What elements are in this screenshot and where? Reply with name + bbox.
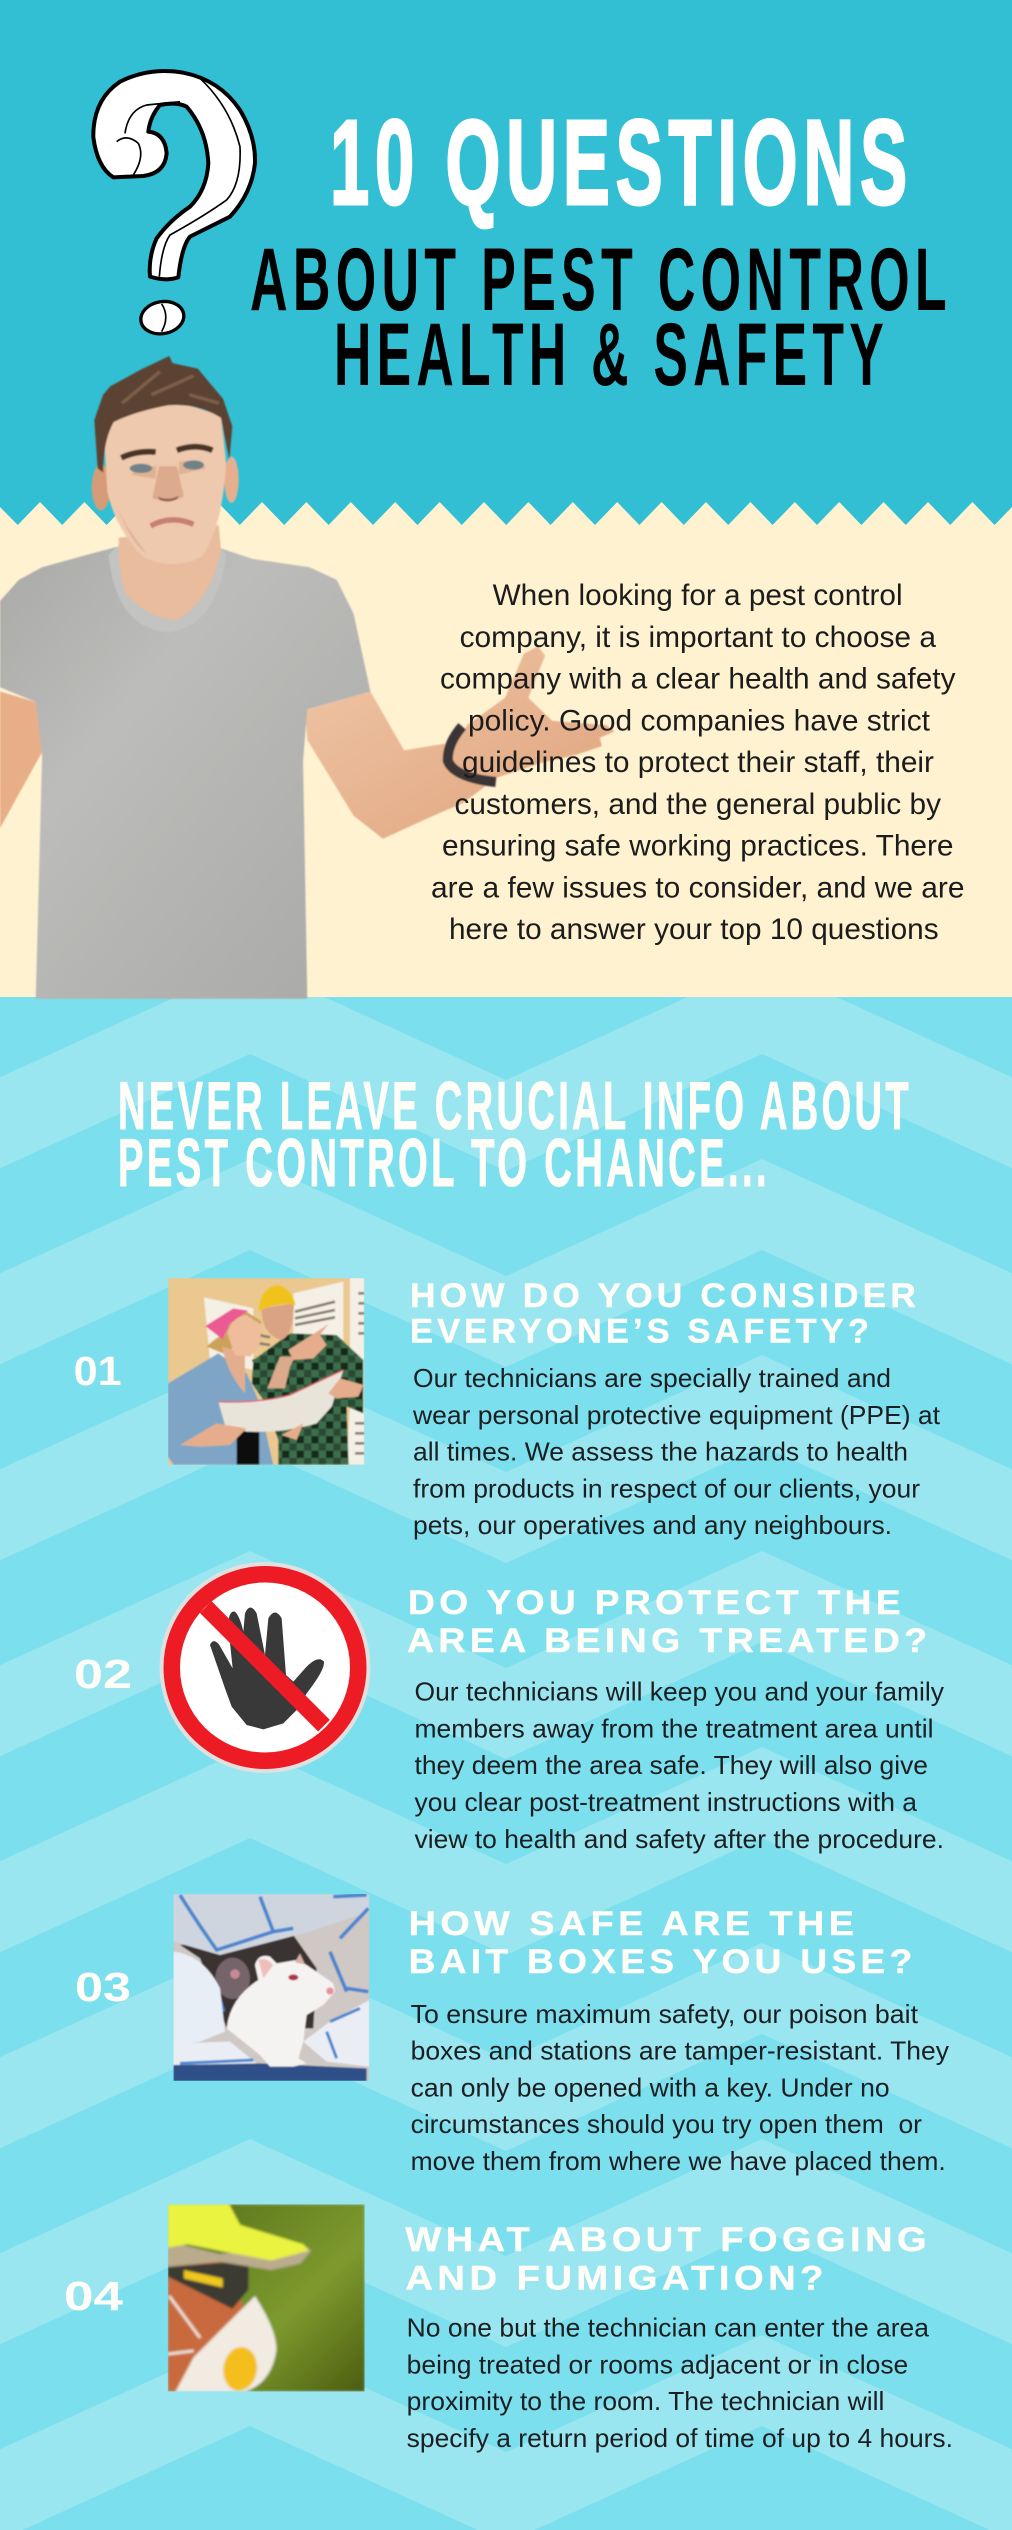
text block: answer 2: they deem the area safe. They will also give [414, 1750, 928, 1780]
cap [168, 2241, 311, 2270]
man in plaid shirt [252, 1333, 363, 1465]
panel: header background [0, 0, 1012, 530]
mask valve [220, 2345, 260, 2393]
text block: intro: When looking for a pest control [493, 579, 903, 612]
text block: answer 3: boxes and stations are tamper-resistant. They [411, 2036, 949, 2066]
woman denim jacket [168, 1353, 273, 1465]
text block: intro: are a few issues to consider, and we are [431, 871, 964, 904]
text block: answer 4: proximity to the room. The technician will [407, 2386, 884, 2416]
heading: question 1: HOW DO YOU CONSIDER [410, 1277, 920, 1315]
text block: intro: guidelines to protect their staff, their [462, 746, 934, 779]
white rat [227, 1956, 335, 2067]
text block: intro: here to answer your top 10 questions [449, 913, 939, 946]
heading: question 3 [409, 1905, 917, 1981]
ears [92, 464, 110, 510]
number 02: 02 [74, 1651, 132, 1697]
number 04: 04 [64, 2273, 123, 2319]
text block: answer 1: pets, our operatives and any neighbours. [413, 1510, 892, 1540]
man's forearm [267, 1357, 295, 1388]
number 01: 01 [74, 1348, 122, 1394]
text block: intro: company, it is important to choose a [460, 621, 937, 654]
text block: answer 3: To ensure maximum safety, our poison bait [411, 1999, 919, 2029]
heading: question 2 [407, 1584, 932, 1660]
icon: question mark [93, 71, 255, 337]
text block: intro [431, 579, 964, 946]
heading: question 1: EVERYONE’S SAFETY? [410, 1312, 873, 1350]
woman's hair [207, 1312, 262, 1353]
text block: intro: ensuring safe working practices. There [442, 830, 954, 862]
woman's neck [222, 1347, 245, 1393]
text block: answer 3: can only be opened with a key. Under no [411, 2072, 890, 2102]
text block: answer 4: specify a return period of time of up to 4 hours. [407, 2423, 953, 2453]
bandana [205, 1308, 248, 1339]
text block: answer 3: circumstances should you try open them or [411, 2109, 922, 2139]
eyebrows [121, 447, 213, 458]
text block: answer 2 [414, 1677, 944, 1854]
text block: answer 3 [411, 1999, 949, 2176]
text block: answer 1: Our technicians are specially trained and [413, 1363, 891, 1393]
face [168, 2260, 245, 2391]
text block: answer 2: Our technicians will keep you and your family [414, 1677, 944, 1707]
text block: intro: policy. Good companies have strict [468, 704, 930, 737]
collar and neck [109, 546, 226, 633]
shutters [204, 1278, 364, 1465]
hands and forearm [180, 1378, 363, 1447]
number 03: 03 [75, 1964, 131, 2010]
heading: question 1 [410, 1277, 920, 1350]
woman's face [227, 1315, 262, 1357]
goggles [168, 2260, 249, 2309]
heading: never leave crucial info [118, 1068, 912, 1201]
text block: answer 4 [407, 2313, 953, 2453]
plans paper [218, 1370, 343, 1432]
bottom cloth [173, 2000, 369, 2067]
dark hollow [180, 1935, 317, 2028]
nose [152, 466, 184, 501]
rope print [180, 1895, 368, 2012]
text block: answer 1: wear personal protective equipment (PPE) at [412, 1400, 941, 1430]
text block: answer 3: move them from where we have placed them. [411, 2146, 946, 2176]
eyes [130, 464, 152, 473]
left pillow [173, 1952, 225, 2045]
watch [448, 726, 496, 782]
man's face [262, 1303, 294, 1340]
hard hat [258, 1285, 296, 1312]
heading: question 2: DO YOU PROTECT THE [408, 1584, 905, 1622]
heading: question 4 [405, 2221, 931, 2298]
face [104, 399, 226, 564]
heading: question 2: AREA BEING TREATED? [407, 1622, 932, 1660]
heading: question 3: BAIT BOXES YOU USE? [409, 1943, 917, 1981]
photo: shrugging man [0, 356, 615, 999]
photo: technician with respirator mask [168, 2204, 365, 2393]
photo: couple reviewing plans [168, 1278, 364, 1465]
panel: cream intro background with zigzag top edge [0, 502, 1012, 997]
text block: answer 1 [412, 1363, 941, 1540]
shirt [0, 547, 370, 999]
photo: white rat in blanket [173, 1894, 369, 2081]
text block: answer 1: all times. We assess the hazards to health [413, 1437, 908, 1467]
text block: answer 2: you clear post-treatment instructions with a [414, 1787, 918, 1817]
mask [176, 2296, 276, 2391]
text block: intro: customers, and the general public by [454, 788, 941, 821]
hair [94, 356, 232, 473]
mouth [151, 520, 194, 526]
text block: answer 4: No one but the technician can enter the area [407, 2313, 930, 2343]
hand [210, 1607, 324, 1729]
text block: answer 2: view to health and safety after the procedure. [414, 1824, 944, 1854]
text block: answer 4: being treated or rooms adjacent or in close [407, 2349, 908, 2379]
heading: question 4: WHAT ABOUT FOGGING [405, 2221, 931, 2259]
brown rat [215, 1958, 250, 1999]
man's hand [288, 1324, 328, 1360]
text block: answer 1: from products in respect of our clients, your [413, 1473, 920, 1503]
text block: intro: company with a clear health and safety [440, 662, 956, 696]
heading: question 4: AND FUMIGATION? [405, 2260, 828, 2298]
heading: about pest control health and safety [250, 229, 952, 404]
top blanket [173, 1894, 369, 1955]
heading: question 3: HOW SAFE ARE THE [409, 1905, 858, 1943]
blue base [173, 2063, 367, 2081]
text block: answer 2: members away from the treatment area until [414, 1714, 934, 1744]
man's left arm [0, 691, 43, 828]
icon: no entry hand sign [160, 1562, 370, 1773]
man's right arm and hand [305, 646, 615, 839]
background: chevron pattern [0, 963, 1012, 2530]
